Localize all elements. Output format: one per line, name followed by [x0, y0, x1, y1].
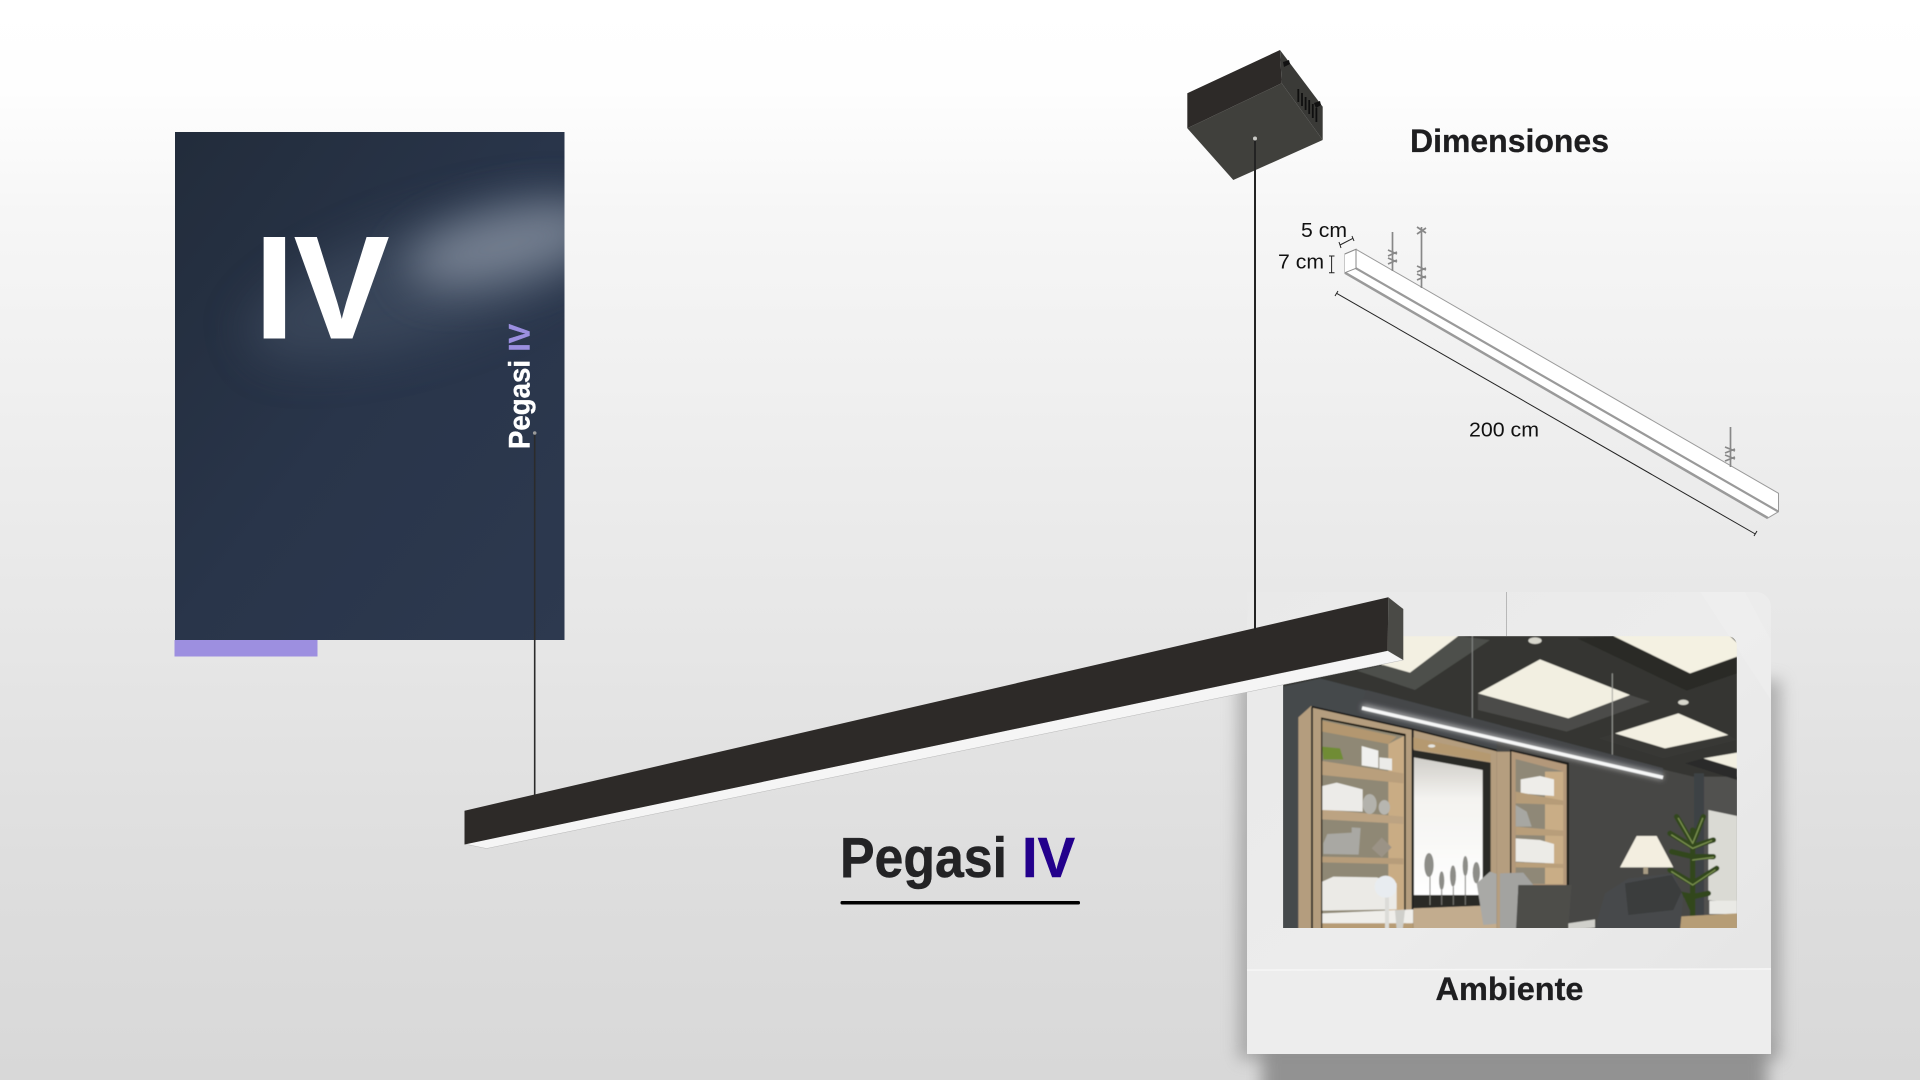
purple accent bar [174, 640, 318, 656]
product title: Pegasi IV [840, 826, 1080, 904]
product title: Pegasi IV: Pegasi [840, 826, 1007, 890]
product title: Pegasi IV: IV [1022, 826, 1075, 890]
right portion of interior [1478, 636, 1737, 930]
left portion of interior [1283, 636, 1500, 930]
caption: Ambiente: Ambiente [1436, 971, 1584, 1007]
lamp outline drawing [1345, 249, 1778, 518]
pictured lamp with light strip [1360, 690, 1663, 780]
vent slots [1298, 89, 1316, 122]
panel: navy cover [175, 132, 564, 640]
vertical label Pegasi IV: Pegasi [504, 360, 536, 449]
suspension cable right [1253, 136, 1257, 630]
dimensions diagram [1278, 220, 1778, 536]
heading: Dimensiones: Dimensiones [1410, 123, 1609, 159]
photo: office interior [1283, 636, 1737, 930]
dimension lines [1329, 236, 1757, 536]
vertical label Pegasi IV: IV [504, 324, 536, 352]
label 7 cm: 7 cm [1278, 252, 1324, 274]
label 200 cm: 200 cm [1469, 420, 1539, 442]
paper card shadow [1238, 680, 1781, 1080]
label 5 cm: 5 cm [1301, 220, 1347, 242]
linear pendant lamp [464, 597, 1403, 848]
suspension cable left [533, 431, 536, 800]
panel: ambiente paper card [1247, 592, 1771, 1054]
large numeral IV: IV [255, 206, 389, 369]
ceiling canopy box [1187, 50, 1323, 180]
hanger wires [1388, 227, 1735, 467]
